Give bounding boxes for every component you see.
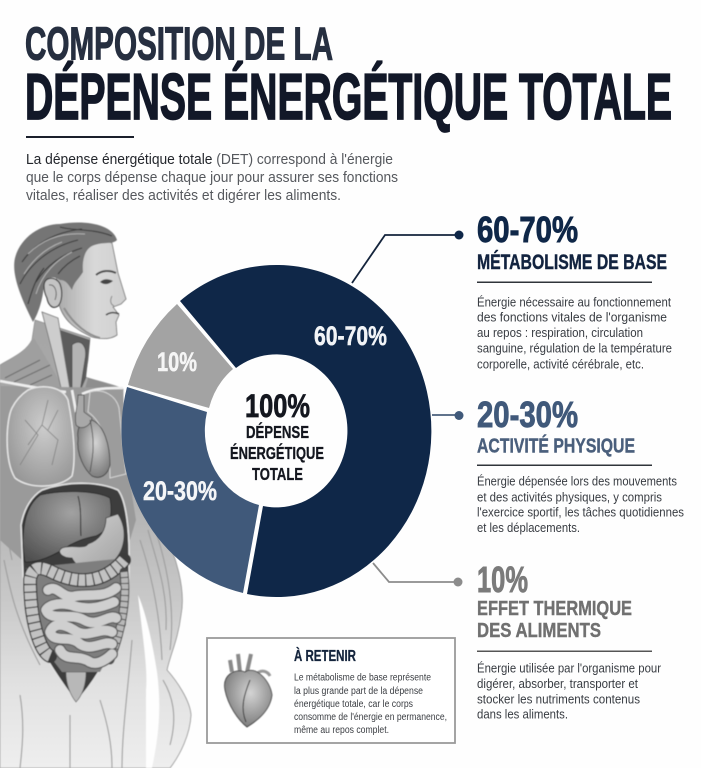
callout text: énergétique totale, car le corps: [294, 699, 413, 710]
body silhouette: [0, 320, 191, 768]
slice labels: 10%: [157, 347, 197, 377]
lungs: [7, 387, 126, 486]
chest cavity: [0, 386, 136, 560]
percentage: 60-70%: [477, 209, 578, 250]
connector: effet thermique: [373, 563, 462, 586]
description: au repos : respiration, circulation: [477, 326, 643, 340]
hair: [14, 223, 117, 322]
percentage: 20-30%: [477, 394, 578, 435]
intro text: [26, 152, 398, 204]
description: l'exercice sportif, les tâches quotidiennes: [477, 506, 684, 520]
centre label: DÉPENSE: [246, 421, 309, 442]
description: Énergie nécessaire au fonctionnement: [477, 294, 671, 310]
section: effet thermique: [477, 559, 661, 722]
connector: métabolisme: [352, 230, 464, 283]
intro text: que le corps dépense chaque jour pour assurer ses fonctions: [26, 170, 398, 186]
slice: activité physique: [121, 387, 259, 593]
description: et les déplacements.: [477, 521, 580, 535]
description: digérer, absorber, transporter et: [477, 677, 638, 691]
description: Énergie utilisée par l'organisme pour: [477, 660, 661, 676]
section: activité physique: [477, 394, 684, 535]
donut chart: [121, 265, 431, 597]
heart: [75, 395, 110, 477]
face features: [96, 271, 116, 275]
section: métabolisme de base: [477, 209, 672, 372]
ear: [44, 278, 62, 307]
forearm and leg muscles: [0, 500, 174, 768]
heading: DES ALIMENTS: [477, 619, 601, 642]
callout text: même au repos complet.: [294, 725, 389, 736]
liver: [23, 492, 111, 562]
colon: [30, 560, 125, 660]
anatomical man illustration: [0, 223, 191, 768]
intro text: vitales, réaliser des activités et digérer les aliments.: [26, 188, 341, 204]
callout heading: À RETENIR: [294, 646, 356, 665]
heading: [477, 597, 632, 642]
callout text: [294, 672, 447, 736]
description: stocker les nutriments contenus: [477, 692, 640, 706]
description: [477, 474, 684, 535]
slice: effet thermique: [128, 304, 233, 408]
head: [14, 223, 126, 339]
slice labels: 20-30%: [143, 476, 217, 506]
description: sanguine, régulation de la température: [477, 342, 672, 356]
callout text: la plus grande part de la dépense: [294, 686, 423, 697]
description: [477, 294, 672, 372]
description: [477, 660, 661, 722]
collar bones: [0, 381, 123, 412]
abdomen border: [21, 483, 129, 702]
centre label: ÉNERGÉTIQUE: [230, 442, 324, 463]
centre label: TOTALE: [252, 464, 303, 484]
intro text: La dépense énergétique totale (DET) correspond à l'énergie: [26, 152, 393, 168]
slice labels: 60-70%: [314, 321, 387, 351]
neck and shoulder muscles: [0, 312, 122, 392]
stomach: [60, 514, 124, 570]
description: Énergie dépensée lors des mouvements: [477, 474, 677, 488]
heading: EFFET THERMIQUE: [477, 597, 632, 620]
heading: ACTIVITÉ PHYSIQUE: [477, 434, 635, 458]
description: dans les aliments.: [477, 708, 568, 722]
slice: métabolisme de base: [180, 265, 431, 597]
connector: activité physique: [432, 411, 464, 420]
description: et des activités physiques, y compris: [477, 490, 662, 504]
title: [25, 18, 672, 133]
percentage: 10%: [477, 559, 528, 600]
centre label: [230, 388, 324, 484]
small intestine: [46, 588, 116, 663]
centre label: 100%: [245, 388, 310, 424]
title: COMPOSITION DE LA: [25, 18, 333, 70]
callout text: consomme de l'énergie en permanence,: [294, 712, 447, 723]
description: corporelle, activité cérébrale, etc.: [477, 358, 644, 372]
slice labels: [143, 321, 387, 506]
callout: à retenir: [207, 638, 455, 743]
bladder: [66, 672, 86, 702]
gap between arm and torso: [138, 595, 159, 768]
description: des fonctions vitales de l'organisme: [477, 310, 667, 324]
callout text: Le métabolisme de base représente: [294, 672, 431, 684]
intestine backing: [26, 558, 126, 672]
icon: heart: [225, 654, 272, 727]
